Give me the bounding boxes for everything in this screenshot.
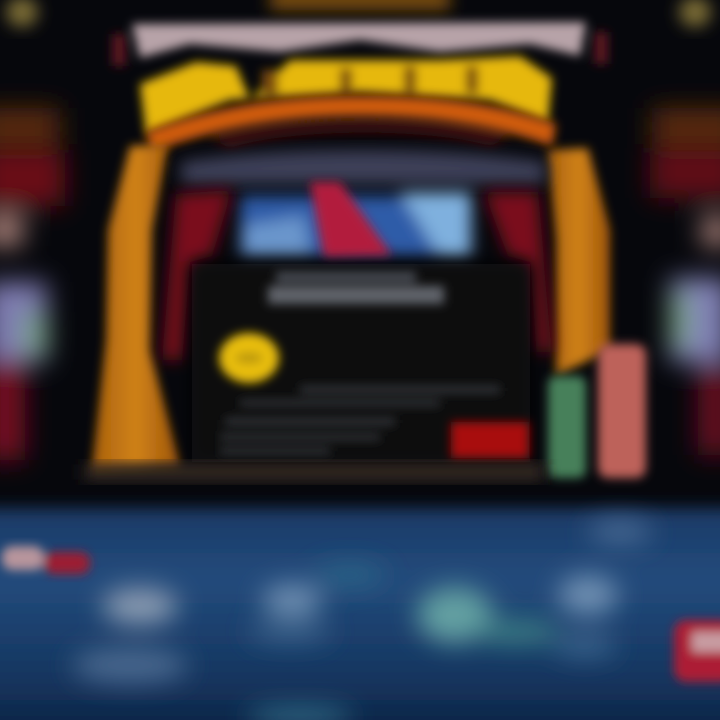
right side panel: red lights and coloured screen xyxy=(650,108,720,455)
floor: blue table surface xyxy=(0,508,720,720)
floor items: right red and white chips xyxy=(674,620,720,682)
text block: blurred screen lines xyxy=(220,386,500,454)
icon: yellow badge xyxy=(219,333,279,383)
stage base: lower ledge xyxy=(84,464,544,480)
marquee: orange arch xyxy=(146,96,556,152)
button: red block xyxy=(451,422,529,458)
corner lights: top glow xyxy=(6,0,711,27)
arch: upper inner band xyxy=(180,150,546,184)
marquee: sign top band xyxy=(112,22,608,66)
curtain: right red xyxy=(484,192,552,352)
left side panel: red lights and coloured screen xyxy=(0,108,65,460)
curtain: center red drape xyxy=(310,182,392,258)
floor labels: pale blurred cards xyxy=(72,520,652,720)
floor items: left red and white chips xyxy=(2,546,90,574)
chip stack: green xyxy=(548,376,586,478)
panel: black screen xyxy=(192,264,530,462)
arch: right column xyxy=(548,148,610,376)
chip stack: salmon xyxy=(598,344,646,478)
curtain: left red xyxy=(162,190,232,360)
heading: blurred screen title xyxy=(268,272,444,304)
stage: blue backdrop xyxy=(240,192,472,256)
marquee: yellow lettering xyxy=(140,56,552,134)
arch: left column xyxy=(92,144,180,470)
